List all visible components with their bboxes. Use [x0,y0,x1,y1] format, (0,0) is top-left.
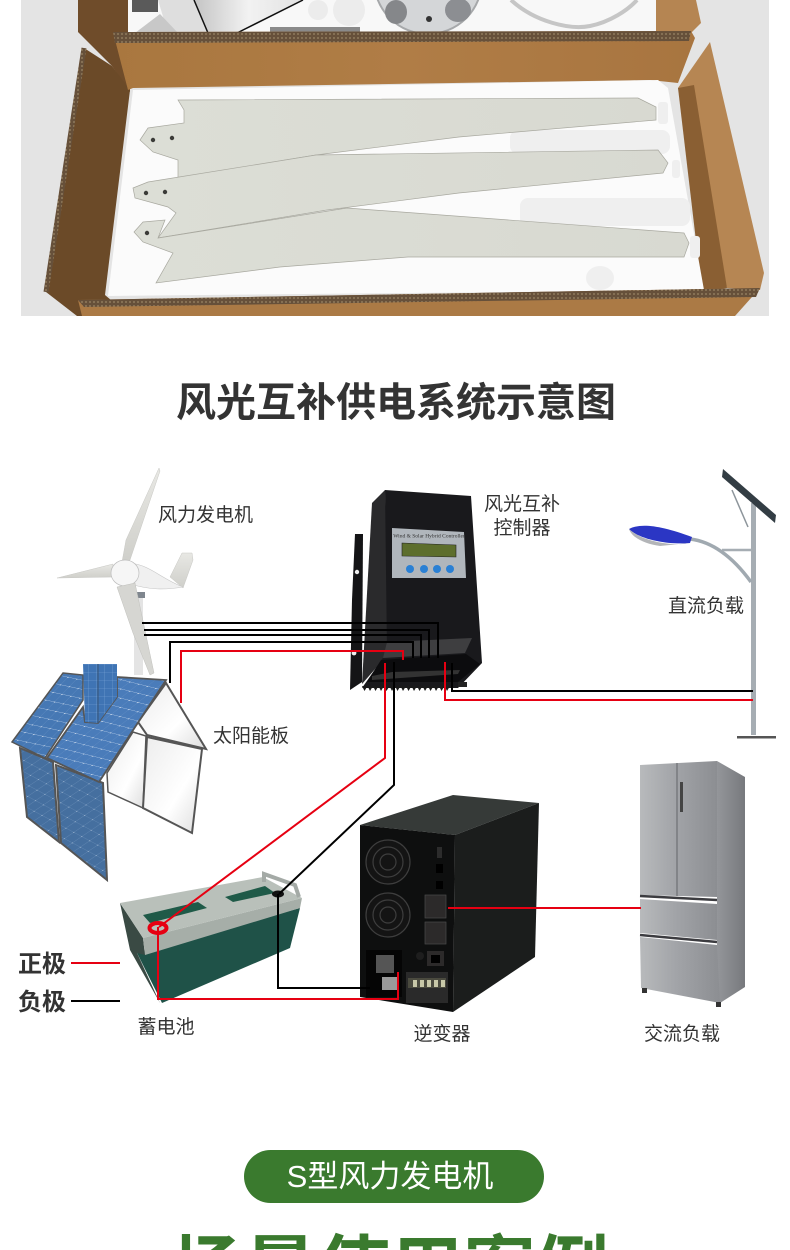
blade 1 [140,98,656,178]
legend: negative [18,989,120,1016]
controller: Wind & Solar Hybrid Controller [393,534,465,540]
section pill: S型风力发电机 [287,1159,493,1194]
DC load label: 直流负载 [668,595,744,617]
legend: positive: 正极 [18,951,66,978]
blade 2 [133,150,668,238]
blade 3 [134,208,689,283]
fridge [640,761,745,1007]
controller label: 风光互补 [484,493,560,515]
solar panel label: 太阳能板 [213,725,289,747]
inverter label: 逆变器 [413,1023,471,1045]
section pill [244,1150,544,1203]
legend: negative: 负极 [18,989,66,1016]
control panel [392,528,466,578]
controller label line 2: 控制器 [493,517,551,539]
inverter terminals [366,950,448,1003]
upper box contents [132,0,637,34]
AC load label: 交流负载 [644,1023,720,1045]
legend: positive [18,951,120,978]
red wires [150,651,753,999]
foam recess shading [510,102,700,290]
wind turbine [57,468,193,675]
battery [120,874,302,1003]
inverter [360,795,539,1012]
black wires [142,623,753,988]
controller [350,490,482,691]
street lamp [629,469,776,738]
cooling fans [366,840,410,937]
wind turbine label: 风力发电机 [158,504,253,526]
house clad with solar panels [12,664,206,880]
battery label: 蓄电池 [137,1016,195,1038]
main title: 风光互补供电系统示意图 [176,381,616,425]
photo: packed turbine blades in carton [0,0,790,320]
